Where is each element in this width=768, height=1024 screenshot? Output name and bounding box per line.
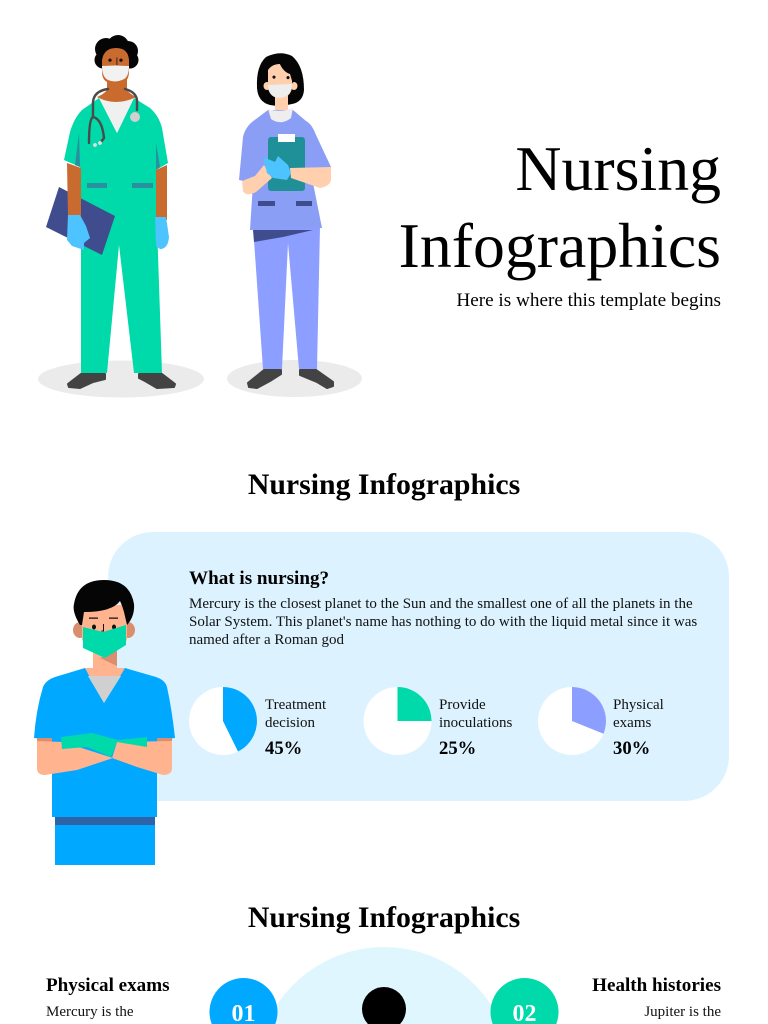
face [268,64,292,98]
neck and chest [97,74,136,108]
undershirt [88,676,121,703]
illustration: female nurse in lilac scrubs [227,53,362,397]
text block: physical exams: Mercury is the [46,1004,134,1020]
section heading 1: Nursing Infographics [248,468,520,501]
text block: health histories: Health histories [592,975,721,996]
panel: what is nursing [108,532,729,801]
pie chart [189,687,257,755]
label: Physical [613,697,664,713]
scrub top [34,668,175,817]
fringe [279,62,294,84]
stat: provide inoculations 25% [364,687,512,759]
pie chart [364,687,432,755]
eyes and nose [108,58,123,65]
eyes, brows and nose [89,618,118,632]
face [82,605,127,650]
arms [67,163,167,220]
pockets [258,201,312,206]
eyes [272,76,290,79]
title: Nursing [515,133,721,204]
label [439,697,512,731]
text block: health histories [592,975,722,1024]
clipboard [268,137,305,191]
neck [85,640,126,703]
hair [257,53,304,106]
pockets [87,183,153,188]
pie chart [538,687,606,755]
subtitle: Here is where this template begins [456,290,721,311]
arm shadow [37,738,172,743]
stat: treatment decision 45% [189,687,327,759]
floor shadow [38,360,204,398]
scrub top [64,98,168,240]
scrub top [239,110,331,230]
floor shadow [227,360,362,397]
stethoscope tips [93,141,102,147]
stethoscope chest piece [130,112,140,122]
gloves [61,733,147,757]
central circle backdrop [267,947,501,1024]
value: 25% [439,738,476,759]
step 02 badge [491,978,558,1024]
hair [74,580,134,625]
label: exams [613,715,651,731]
face mask [83,625,126,658]
trousers [253,226,320,369]
crossed arms [37,741,172,775]
neck [275,94,288,111]
panel body text: Solar System. This planet's name has nothing to do with the liquid metal since it was [189,614,697,630]
stat: physical exams 30% [538,687,664,759]
central head icon [362,987,406,1024]
neck shadow [100,650,117,666]
arms [242,165,331,194]
ears [73,622,87,638]
label [613,697,664,731]
panel body text: Mercury is the closest planet to the Sun and the smallest one of all the planets in the [189,596,693,612]
panel body text [189,596,697,648]
label [265,697,327,731]
trousers [81,225,162,373]
section heading 2: Nursing Infographics [248,901,520,934]
label: decision [265,715,315,731]
waist shadow [253,230,313,242]
title: Infographics [399,210,721,281]
trousers [55,817,155,865]
shoes [248,370,333,388]
gloves [263,156,291,180]
face [102,48,129,84]
step 01 badge [210,978,278,1024]
clipboard clip [278,134,295,142]
title [399,133,721,281]
label: Provide [439,697,486,713]
shoes [68,374,175,388]
value: 45% [265,738,302,759]
undershirt [99,98,134,133]
text block: health histories: Jupiter is the [644,1004,721,1020]
label: inoculations [439,715,512,731]
value: 30% [613,738,650,759]
belt [55,817,155,825]
hair [94,35,138,68]
clipboard [46,187,115,255]
text block: physical exams [46,975,170,1024]
ears [264,82,270,90]
panel background [108,532,729,801]
illustration: nurse with crossed arms [34,580,175,865]
stethoscope [89,89,137,143]
sleeve shadows [75,133,160,170]
panel heading: What is nursing? [189,568,329,589]
face mask [102,66,129,82]
panel body text: named after a Roman god [189,632,344,648]
face mask [268,84,292,98]
text block: physical exams: Physical exams [46,975,170,996]
illustration: male nurse in green scrubs [38,35,204,398]
collar [268,108,293,122]
gloves [67,215,169,250]
label: Treatment [265,697,327,713]
